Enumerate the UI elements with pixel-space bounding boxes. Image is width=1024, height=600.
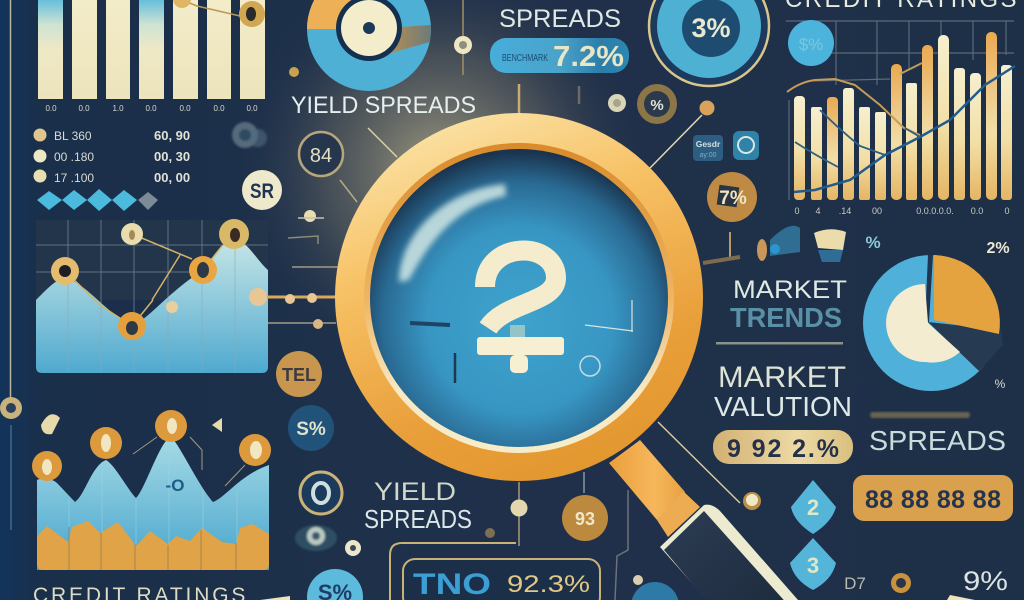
bar chart: top left: 0.0	[246, 104, 258, 113]
ring badge: 3 percent	[649, 0, 769, 86]
bar and line chart: top right: 0.0	[971, 206, 983, 216]
lens	[370, 149, 668, 447]
mountain area chart: lower left: -O	[166, 476, 184, 495]
bar and line chart: top right: 0	[1004, 206, 1010, 216]
badge: blue bottom	[307, 569, 363, 600]
bar and line chart: top right: .14	[839, 206, 851, 216]
badge: TEL: TEL	[282, 365, 316, 385]
box: value callout: 92.3%	[507, 571, 590, 598]
bar chart: top left: 0.0	[78, 104, 90, 113]
logo icons: ay:00	[699, 152, 717, 159]
bar chart: top left: 0.0	[179, 104, 191, 113]
donut chart top	[307, 0, 431, 91]
pie chart right	[863, 255, 1006, 391]
left edge node	[0, 397, 22, 419]
heading: market trends	[716, 276, 847, 344]
diamonds with numbers	[790, 480, 836, 590]
diamonds with numbers: 2	[807, 495, 819, 520]
ring badge: 3 percent: 3%	[691, 13, 731, 43]
pill: 2 percent: 9 92 2.%	[727, 435, 839, 463]
small icons above market: 2%	[986, 240, 1010, 257]
small gold dot	[289, 67, 299, 77]
lens glare	[399, 184, 506, 282]
heading: yield spreads lower: YIELD	[374, 478, 456, 506]
node and badge below lens	[345, 472, 608, 556]
bar chart: top left: 0.0	[145, 104, 157, 113]
bar chart: top left	[38, 0, 265, 113]
small nodes: %	[650, 97, 664, 114]
magnifier	[335, 113, 798, 600]
node and badge below lens: 93	[575, 509, 595, 529]
inner ring highlight	[364, 143, 674, 453]
bar and line chart: top right: 0	[794, 206, 800, 216]
heading: spreads right: SPREADS	[869, 425, 1006, 456]
lens marks	[410, 300, 633, 383]
heading: market valuation: VALUTION	[714, 391, 852, 422]
bar and line chart: top right: 00	[872, 206, 882, 216]
pill: 1.2 percent: 7.2%	[553, 41, 624, 73]
mountain area chart: lower left	[32, 410, 271, 570]
connector beads to magnifier	[249, 210, 340, 329]
badge ring: 84	[299, 132, 343, 176]
bar chart: top left: 1.0	[112, 104, 124, 113]
badge: S%: S%	[296, 419, 326, 440]
bar and line chart: top right	[786, 20, 1015, 216]
diamonds with numbers: 3	[807, 553, 819, 578]
legend list: 60, 90	[154, 128, 190, 143]
heading: yield spreads lower: SPREADS	[364, 504, 472, 534]
area chart: middle left	[36, 219, 268, 373]
small cream tab	[260, 596, 290, 600]
badge: SR: SR	[250, 180, 274, 203]
heading: market valuation	[714, 361, 852, 422]
legend list	[34, 128, 190, 185]
small value with coin	[844, 573, 911, 593]
heading: market trends: TRENDS	[730, 302, 842, 333]
badge ring: 84: 84	[310, 145, 332, 167]
heading: spreads top: SPREADS	[499, 5, 621, 33]
magnifier handle	[609, 440, 798, 600]
legend list: 00, 00	[154, 170, 190, 185]
blue half circle bottom	[631, 575, 679, 600]
question mark	[477, 251, 564, 373]
small icons above market: %	[865, 233, 881, 252]
legend list: 17 .100	[54, 171, 94, 185]
cream tab bottom right	[947, 595, 975, 600]
diamond rating row	[37, 189, 158, 211]
badge: 7 percent: 7%	[719, 188, 747, 209]
heading: yield spreads: YIELD SPREADS	[291, 92, 476, 119]
bar and line chart: top right: 0.0.0.0.0.	[916, 206, 954, 216]
bar chart: top left: 0.0	[213, 104, 225, 113]
legend list: 00 .180	[54, 150, 94, 164]
orange panel with figures	[853, 475, 1013, 521]
bar and line chart: top right: 4	[815, 206, 821, 216]
heading: market trends: MARKET	[733, 276, 847, 304]
logo icons	[693, 131, 759, 161]
connector to node	[658, 422, 761, 510]
small value with coin: D7	[844, 574, 866, 593]
swirl icon	[232, 122, 267, 148]
small nodes	[340, 84, 714, 202]
badge: 7 percent	[707, 172, 757, 222]
pie chart right: %	[995, 377, 1006, 391]
pill: 2 percent	[713, 430, 853, 464]
orange panel with figures: 88 88 88 88	[865, 486, 1001, 514]
value: 9 percent: 9%	[963, 566, 1008, 596]
badge ring: 0	[300, 472, 342, 514]
smudged label	[870, 412, 970, 418]
badge: SR	[242, 170, 282, 210]
box: value callout	[390, 490, 628, 600]
heading: yield spreads lower	[364, 478, 472, 534]
badge: S%	[288, 405, 334, 451]
small icons above market	[703, 226, 1010, 263]
bar and line chart: top right: $%	[799, 35, 823, 54]
node top	[454, 0, 472, 75]
magnifier ring	[335, 113, 703, 481]
heading: market valuation: MARKET	[718, 361, 846, 394]
swirl icon lower	[295, 525, 337, 551]
badge: TEL	[276, 351, 322, 397]
legend list: BL 360	[54, 129, 92, 143]
legend list: 00, 30	[154, 149, 190, 164]
logo icons: Gesdr	[696, 139, 721, 149]
pill: 1.2 percent	[490, 38, 629, 73]
pill: 1.2 percent: BENCHMARK	[502, 53, 548, 64]
bar chart: top left: 0.0	[45, 104, 57, 113]
